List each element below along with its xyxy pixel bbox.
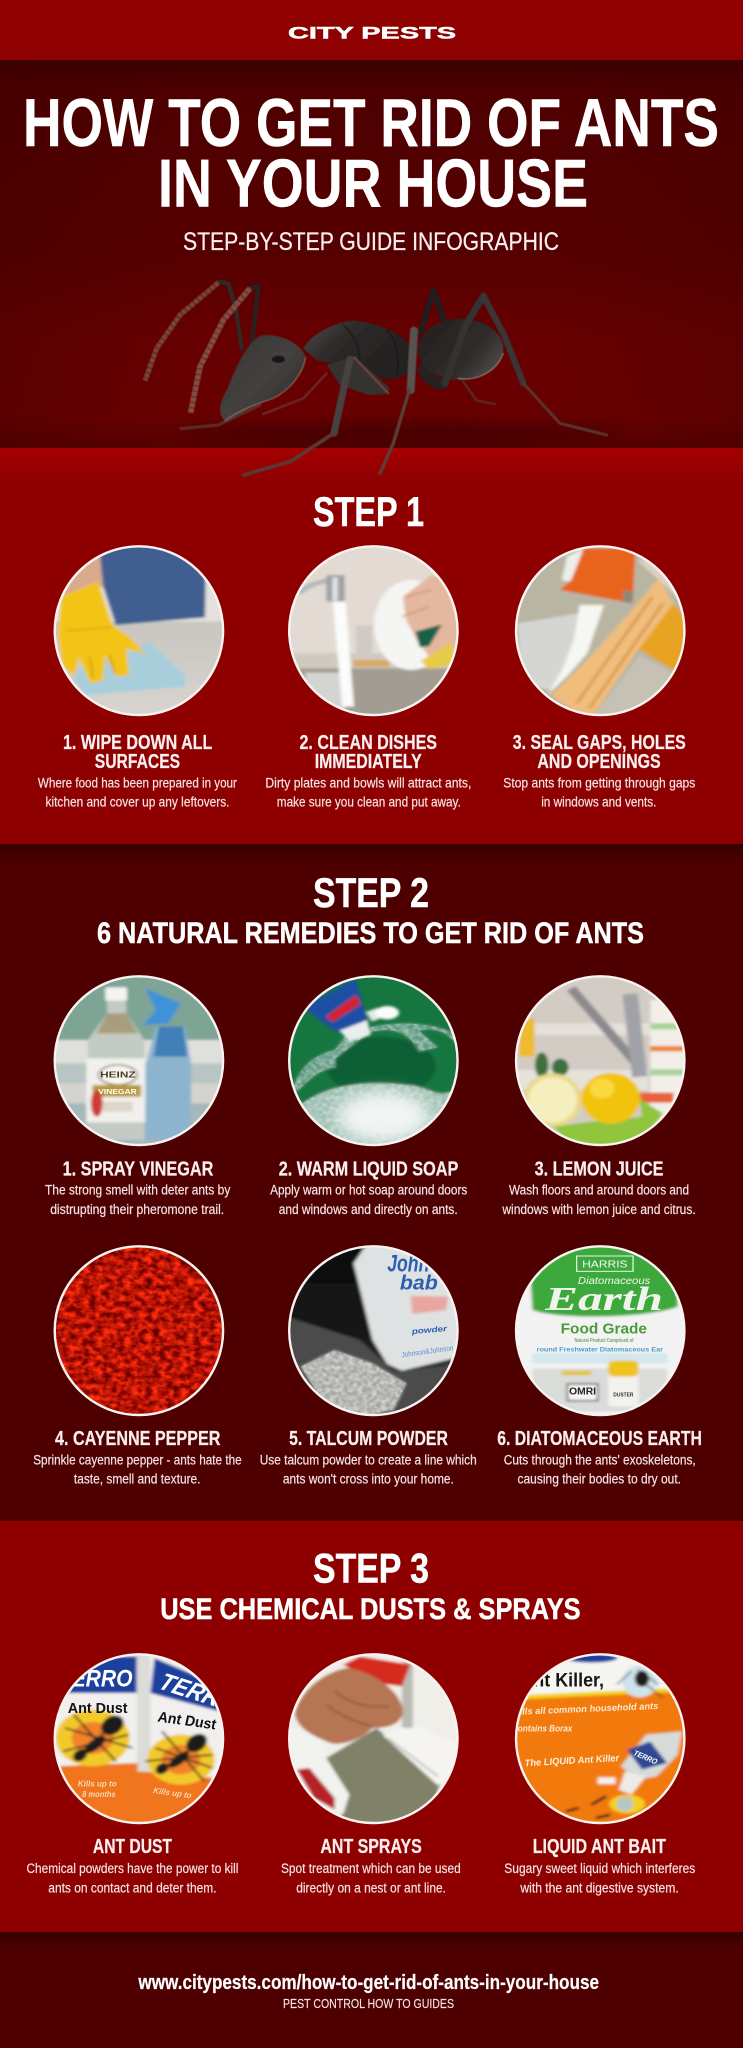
item heading: 3. LEMON JUICE (535, 1158, 664, 1180)
description: Apply warm or hot soap around doors (270, 1183, 467, 1199)
photo: caulking gun (514, 545, 688, 718)
description (26, 1861, 238, 1896)
item heading (300, 731, 437, 773)
description: directly on a nest or ant line. (296, 1880, 446, 1896)
item heading: 1. WIPE DOWN ALL (63, 731, 212, 754)
item heading: LIQUID ANT BAIT (533, 1835, 666, 1858)
title (23, 85, 719, 222)
photo: talcum powder bottle: bab (400, 1271, 438, 1294)
footer url: www.citypests.com/how-to-get-rid-of-ants-in-your-house (138, 1972, 599, 1994)
panel: footer (0, 1932, 743, 2048)
description: and windows and directly on ants. (279, 1202, 458, 1218)
item heading: 5. TALCUM POWDER (289, 1427, 448, 1450)
photo: liquid ant killer package: nt Killer, (533, 1669, 604, 1691)
item: ant dust (26, 1653, 238, 1896)
photo: Terro ant dust boxes: Ant Dust (68, 1700, 128, 1717)
description: make sure you clean and put away. (277, 794, 461, 810)
photo: Terro ant dust boxes (53, 1653, 226, 1826)
item: ant sprays (281, 1653, 461, 1896)
photo: Harris diatomaceous earth bag: Natural Product Comprised of (575, 1338, 634, 1344)
description: Where food has been prepared in your (38, 776, 237, 792)
description (270, 1183, 467, 1218)
title: IN YOUR HOUSE (158, 146, 588, 222)
description: Spot treatment which can be used (281, 1861, 461, 1877)
item heading (63, 731, 212, 773)
description: ants on contact and deter them. (48, 1880, 217, 1896)
subheading: USE CHEMICAL DUSTS & SPRAYS (160, 1593, 581, 1626)
photo: Harris diatomaceous earth bag: Food Grade (561, 1321, 647, 1337)
photo: Harris diatomaceous earth bag: DUSTER (613, 1392, 634, 1398)
item heading: 2. CLEAN DISHES (300, 731, 437, 754)
photo: vinegar bottle: VINEGAR (98, 1087, 137, 1096)
photo: Terro ant dust boxes: ERRO (72, 1664, 133, 1692)
photo: soap in green basin (286, 975, 461, 1148)
panel: step 2 (0, 844, 743, 1521)
description (504, 1861, 695, 1896)
item heading (513, 731, 686, 773)
item: diatomaceous earth (497, 1245, 702, 1488)
item heading: SURFACES (95, 750, 180, 773)
description: in windows and vents. (541, 794, 656, 810)
description: Sugary sweet liquid which interferes (504, 1861, 695, 1877)
photo: Terro ant dust boxes: Kills up to (78, 1779, 117, 1789)
description: windows with lemon juice and citrus. (502, 1202, 696, 1218)
description: Dirty plates and bowls will attract ants, (265, 776, 471, 792)
subheading: 6 NATURAL REMEDIES TO GET RID OF ANTS (97, 917, 644, 950)
description (502, 1183, 696, 1218)
photo: Harris diatomaceous earth bag: OMRI (569, 1386, 596, 1397)
description (260, 1452, 477, 1488)
item heading: 2. WARM LIQUID SOAP (279, 1158, 458, 1180)
description (504, 1452, 696, 1488)
photo: Terro ant dust boxes: TERR (155, 1668, 226, 1712)
description: The strong smell with deter ants by (45, 1183, 231, 1199)
photo: liquid ant killer package (514, 1653, 688, 1826)
panel: step 1 (0, 448, 743, 844)
heading: step 2: STEP 2 (313, 869, 429, 916)
description: ants won't cross into your home. (283, 1472, 454, 1488)
description: Sprinkle cayenne pepper - ants hate the (33, 1452, 242, 1468)
photo: Terro ant dust boxes: Kills up to (152, 1786, 193, 1801)
photo: liquid ant killer package: TERRO (632, 1748, 660, 1766)
photo: Harris diatomaceous earth bag: round Freshwater Diatomaceous Ear (537, 1345, 663, 1353)
item: warm liquid soap (270, 975, 467, 1218)
item: lemon juice (502, 975, 696, 1218)
item heading: ANT DUST (93, 1835, 172, 1858)
photo: talcum powder bottle: powder (410, 1324, 448, 1336)
photo: vinegar bottle: HEINZ (100, 1071, 136, 1080)
description: kitchen and cover up any leftovers. (46, 794, 230, 810)
item heading: IMMEDIATELY (315, 750, 422, 773)
description (265, 776, 471, 810)
item: spray vinegar (45, 975, 231, 1218)
photo: Harris diatomaceous earth bag: Earth (544, 1281, 663, 1318)
photo: lemons at the sink (514, 975, 688, 1148)
photo: hand with spray bottle (286, 1653, 461, 1826)
header band (0, 0, 743, 60)
item: wipe down all surfaces (38, 545, 237, 810)
description: with the ant digestive system. (520, 1880, 679, 1896)
photo: washing dishes (286, 545, 461, 718)
description: Wash floors and around doors and (509, 1183, 689, 1199)
item heading: AND OPENINGS (537, 750, 661, 773)
description (38, 776, 237, 810)
photo: Harris diatomaceous earth bag (514, 1245, 688, 1418)
item: talcum powder (260, 1245, 477, 1488)
heading: step 1: STEP 1 (313, 488, 424, 535)
photo: liquid ant killer package: The LIQUID Ant Killer (524, 1753, 620, 1769)
photo: Terro ant dust boxes: 8 months (82, 1790, 116, 1800)
photo: talcum powder bottle: John (387, 1250, 429, 1277)
description: causing their bodies to dry out. (518, 1472, 681, 1488)
heading: step 3: STEP 3 (313, 1544, 429, 1592)
illustration: black ant (145, 282, 607, 475)
item heading: ANT SPRAYS (320, 1835, 422, 1858)
item: cayenne pepper (33, 1245, 242, 1488)
photo: Terro ant dust boxes: Ant Dust (156, 1708, 218, 1733)
description (503, 776, 695, 810)
photo: liquid ant killer package: ills all common household ants (519, 1701, 659, 1717)
description (281, 1861, 461, 1896)
description: taste, smell and texture. (74, 1472, 200, 1488)
subtitle: STEP-BY-STEP GUIDE INFOGRAPHIC (183, 228, 559, 256)
photo: talcum powder bottle (286, 1245, 461, 1418)
panel: step 3 (27, 1553, 695, 1896)
item: liquid ant bait (504, 1653, 695, 1896)
description: Chemical powders have the power to kill (26, 1861, 238, 1877)
description: distrupting their pheromone trail. (50, 1202, 224, 1218)
item heading: 3. SEAL GAPS, HOLES (513, 731, 686, 754)
photo: vinegar bottle (53, 975, 225, 1148)
description (45, 1183, 231, 1218)
description (33, 1452, 242, 1488)
item heading: 1. SPRAY VINEGAR (63, 1158, 213, 1180)
description: Use talcum powder to create a line which (260, 1452, 477, 1468)
photo: Harris diatomaceous earth bag: Diatomaceous (578, 1276, 651, 1287)
description: Cuts through the ants' exoskeletons, (504, 1452, 696, 1468)
item heading: 4. CAYENNE PEPPER (55, 1427, 221, 1450)
photo: talcum powder bottle: Johnson&Johnson (400, 1343, 454, 1359)
description: Stop ants from getting through gaps (503, 776, 695, 792)
photo: Harris diatomaceous earth bag: HARRIS (582, 1260, 628, 1270)
logo: City Pests: CITY PESTS (288, 24, 456, 42)
footer tagline: PEST CONTROL HOW TO GUIDES (283, 1996, 454, 2011)
photo: liquid ant killer package: ontains Borax (518, 1723, 573, 1734)
photo: gloved hand wiping (53, 545, 225, 718)
item: seal gaps (503, 545, 695, 810)
photo: cayenne powder (53, 1245, 225, 1418)
item: clean dishes immediately (265, 545, 471, 810)
panel: hero (0, 60, 743, 448)
